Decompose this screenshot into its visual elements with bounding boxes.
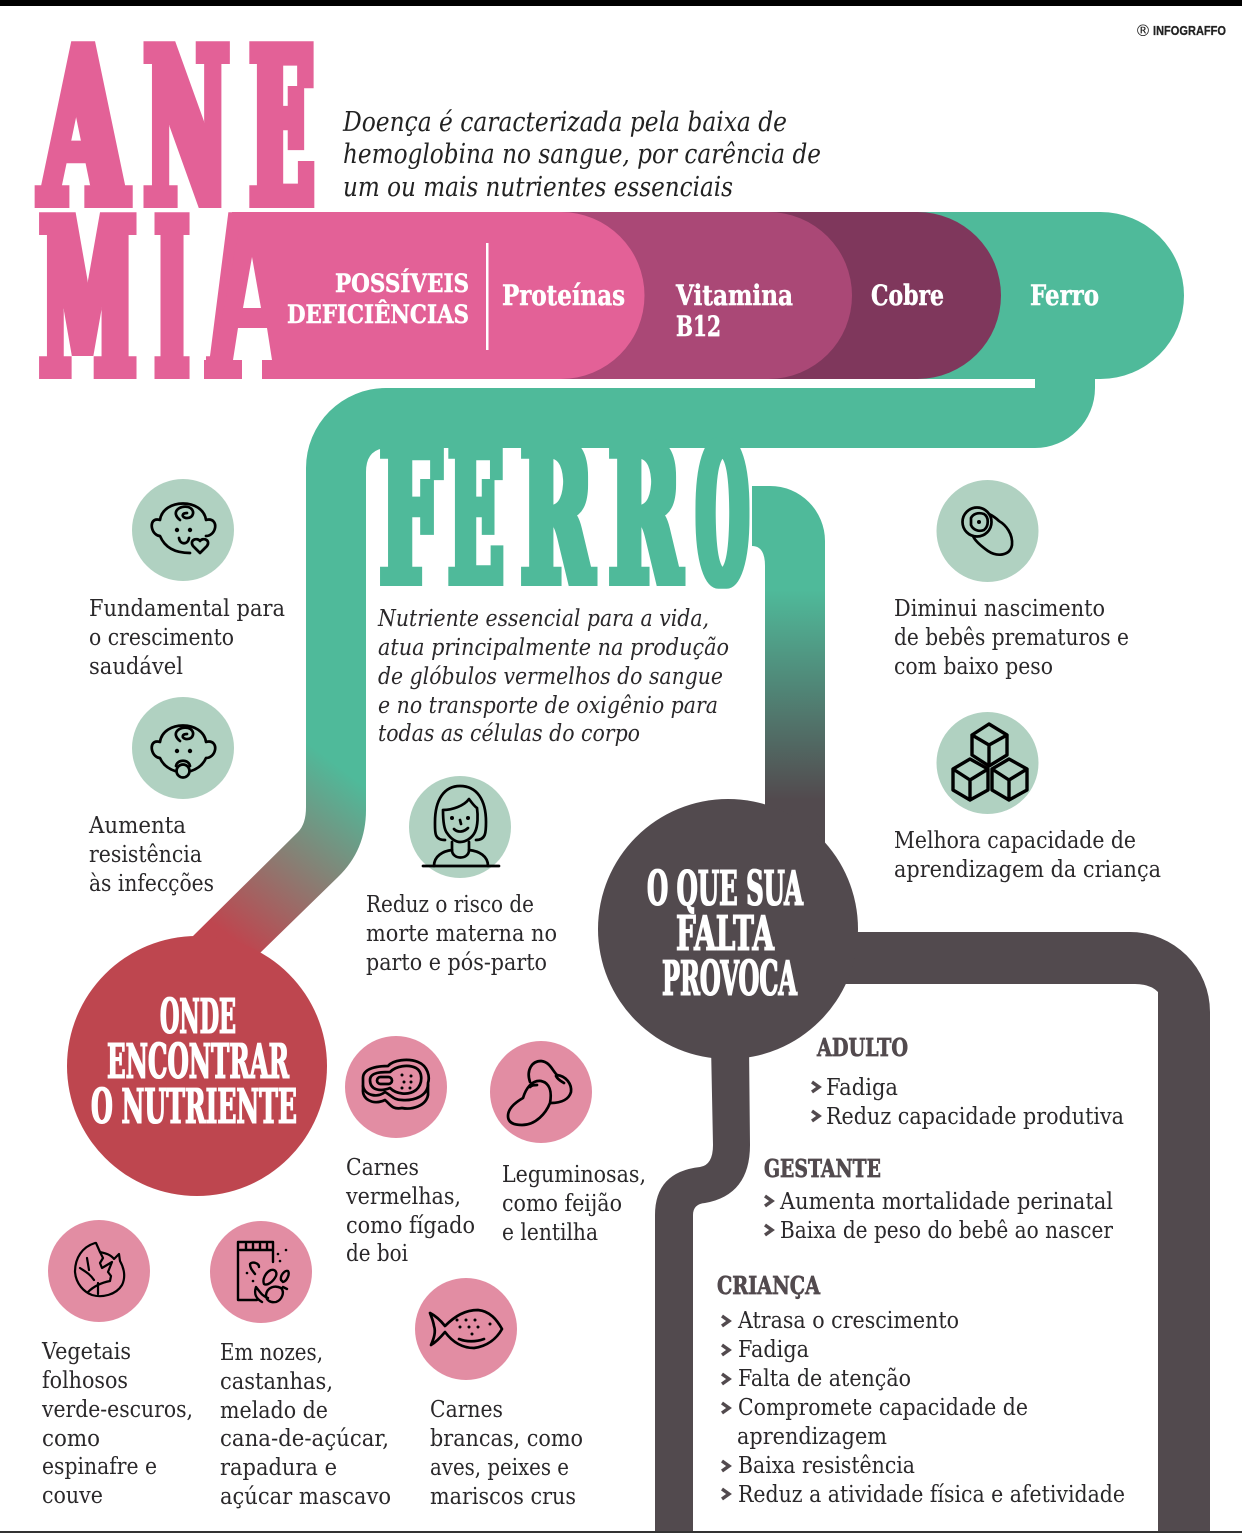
text: red meat: Carnes [346, 1153, 419, 1181]
text: leafy greens: folhosos [42, 1366, 128, 1394]
logo: Infograffo: INFOGRAFFO [1153, 24, 1226, 38]
text: nuts: Em nozes, [220, 1338, 323, 1366]
list: child: Compromete capacidade de [738, 1393, 1028, 1421]
pipe: teal to dark toward deficiency circle [752, 486, 825, 860]
band: possible deficiencies: Cobre [871, 279, 944, 312]
circle: what its lack causes [598, 799, 858, 1059]
text: red meat [345, 1153, 475, 1267]
icon: swaddled baby [936, 480, 1038, 582]
text: iron description: de glóbulos vermelhos do sangue [378, 662, 723, 690]
heading: FERRO [380, 404, 748, 627]
logo: Infograffo [1135, 21, 1226, 40]
icon: baby with pacifier [132, 697, 234, 799]
intro text: hemoglobina no sangue, por carência de [343, 139, 821, 170]
text: premature births: com baixo peso [894, 652, 1053, 680]
list: pregnant [764, 1154, 1114, 1244]
text: maternal risk: parto e pós-parto [366, 948, 547, 976]
list: pregnant: GESTANTE [764, 1154, 881, 1183]
text: leafy greens: verde-escuros, [41, 1395, 193, 1423]
text: maternal risk: Reduz o risco de [366, 890, 534, 918]
logo: Infograffo: ® [1135, 21, 1151, 40]
text: learning: aprendizagem da criança [894, 855, 1161, 883]
text: resistance: às infecções [89, 869, 214, 897]
text: white meat: mariscos crus [430, 1482, 576, 1510]
text: iron description: e no transporte de oxigênio para [378, 691, 718, 719]
heading: FERRO: R [609, 404, 682, 627]
segment: Ferro [800, 212, 1184, 379]
list: pregnant: Aumenta mortalidade perinatal [779, 1187, 1113, 1215]
list: child: Baixa resistência [738, 1451, 915, 1479]
text: red meat: de boi [346, 1239, 408, 1267]
pipe: teal from Ferro to the food circle [192, 370, 1095, 953]
text: leafy greens: couve [42, 1481, 103, 1509]
list: child: Fadiga [738, 1335, 809, 1363]
icon: happy baby [132, 479, 234, 581]
text: legumes: como feijão [502, 1189, 622, 1217]
text: O [697, 404, 748, 627]
text: iron description: todas as células do corpo [378, 719, 640, 747]
list: child [717, 1271, 1125, 1508]
list: child: Reduz a atividade física e afetividade [738, 1480, 1125, 1508]
icon: fish [415, 1278, 517, 1380]
band: possible deficiencies: POSSÍVEIS [335, 269, 469, 298]
text: white meat: brancas, como [430, 1424, 583, 1452]
pipe: dark right side [830, 932, 1210, 1531]
text: red meat: como fígado [346, 1211, 475, 1239]
icon: woman [409, 776, 511, 878]
text: nuts [220, 1338, 391, 1510]
list: adult: ADULTO [816, 1033, 908, 1062]
list: child: CRIANÇA [717, 1271, 820, 1300]
text: growth: o crescimento [89, 623, 234, 651]
circle: where to find the nutrient: ONDE [160, 989, 236, 1045]
title: ANEMIA: A [211, 172, 265, 425]
text: leafy greens: como [42, 1424, 100, 1452]
intro text [342, 107, 821, 203]
intro text: um ou mais nutrientes essenciais [343, 172, 733, 203]
icon: cubes [936, 712, 1038, 814]
icon: beans [490, 1041, 592, 1143]
pipe: dark lower branch [655, 1045, 750, 1531]
text: growth [89, 594, 285, 680]
list: child: Atrasa o crescimento [737, 1306, 959, 1334]
text: resistance: Aumenta [88, 811, 186, 839]
text: nuts: castanhas, [220, 1367, 333, 1395]
list: adult [812, 1033, 1124, 1130]
band: possible deficiencies: Vitamina [675, 279, 793, 312]
text: legumes: e lentilha [502, 1218, 598, 1246]
list: child: aprendizagem [737, 1422, 887, 1450]
circle: where to find the nutrient: ENCONTRAR [107, 1034, 290, 1090]
text: nuts: cana-de-açúcar, [220, 1424, 389, 1452]
heading: FERRO: R [521, 404, 594, 627]
circle: where to find the nutrient: O NUTRIENTE [91, 1079, 297, 1135]
title: ANEMIA: N [145, 1, 228, 254]
text: resistance [88, 811, 214, 897]
title: ANEMIA: I [157, 172, 187, 425]
band: possible deficiencies: B12 [676, 310, 721, 343]
circle: what its lack causes: FALTA [676, 906, 774, 962]
text: white meat: Carnes [430, 1395, 503, 1423]
text: iron description: Nutriente essencial para a vida, [377, 604, 709, 632]
icon: bag of nuts [210, 1221, 312, 1323]
text: premature births: de bebês prematuros e [894, 623, 1129, 651]
title: ANEMIA: A [40, 1, 128, 254]
text: premature births [894, 594, 1129, 680]
text: E [251, 1, 313, 254]
heading: FERRO: E [449, 404, 503, 627]
text: legumes: Leguminosas, [502, 1160, 646, 1188]
title: ANEMIA [40, 1, 313, 425]
heading: FERRO: F [380, 404, 441, 627]
band: possible deficiencies: Proteínas [502, 279, 625, 312]
text: leafy greens: Vegetais [41, 1337, 131, 1365]
list: child: Falta de atenção [738, 1364, 911, 1392]
text: maternal risk: morte materna no [366, 919, 557, 947]
text: growth: saudável [89, 652, 183, 680]
text: premature births: Diminui nascimento [894, 594, 1105, 622]
list: pregnant: Baixa de peso do bebê ao nascer [780, 1216, 1114, 1244]
icon: lettuce [48, 1220, 150, 1322]
text: growth: Fundamental para [89, 594, 285, 622]
text: nuts: melado de [220, 1396, 328, 1424]
list: adult: Fadiga [826, 1073, 898, 1101]
text: white meat [430, 1395, 583, 1510]
text: learning [894, 826, 1161, 883]
text: resistance: resistência [89, 840, 202, 868]
icon: steak [345, 1036, 447, 1138]
circle: what its lack causes: PROVOCA [662, 951, 797, 1007]
text: leafy greens [41, 1337, 193, 1509]
circle: what its lack causes: O QUE SUA [647, 861, 803, 917]
text: iron description: atua principalmente na produção [378, 633, 729, 661]
text: maternal risk [366, 890, 557, 976]
list: adult: Reduz capacidade produtiva [826, 1102, 1124, 1130]
band: possible deficiencies: Ferro [1030, 279, 1099, 312]
text: nuts: rapadura e [220, 1453, 337, 1481]
text: legumes [502, 1160, 646, 1246]
text: leafy greens: espinafre e [42, 1452, 157, 1480]
title: ANEMIA: M [41, 172, 135, 425]
intro text: Doença é caracterizada pela baixa de [342, 107, 787, 138]
band: possible deficiencies: DEFICIÊNCIAS [287, 300, 469, 329]
circle: where to find the nutrient [67, 936, 327, 1196]
text: learning: Melhora capacidade de [894, 826, 1136, 854]
band: possible deficiencies [204, 212, 1184, 379]
text: red meat: vermelhas, [345, 1182, 461, 1210]
text: white meat: aves, peixes e [430, 1453, 569, 1481]
text: iron description [377, 604, 729, 747]
text: nuts: açúcar mascavo [220, 1482, 391, 1510]
